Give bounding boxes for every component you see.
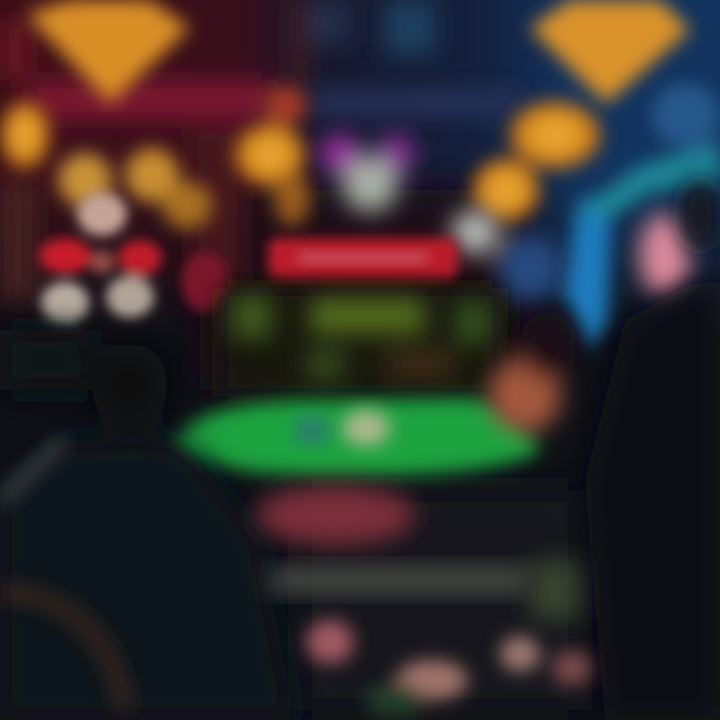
person: right hand <box>489 311 576 433</box>
ceiling bands <box>0 0 520 300</box>
table edge highlight at left <box>0 435 68 510</box>
game board <box>220 288 500 396</box>
lamps: small gold cluster <box>0 85 601 229</box>
lamp: top left diamond <box>26 0 190 104</box>
blue wall and teal swoosh <box>451 83 720 350</box>
chips and cards on floor <box>255 485 592 716</box>
chair <box>0 592 125 710</box>
red and white lights at left <box>39 192 229 324</box>
red sign <box>268 238 458 280</box>
green poker table <box>172 398 540 476</box>
pink highlight <box>639 213 691 297</box>
person: foreground left <box>0 330 295 720</box>
person: foreground right <box>585 179 720 720</box>
purple and white lights <box>320 134 414 212</box>
lamp: top right diamond <box>530 0 690 104</box>
